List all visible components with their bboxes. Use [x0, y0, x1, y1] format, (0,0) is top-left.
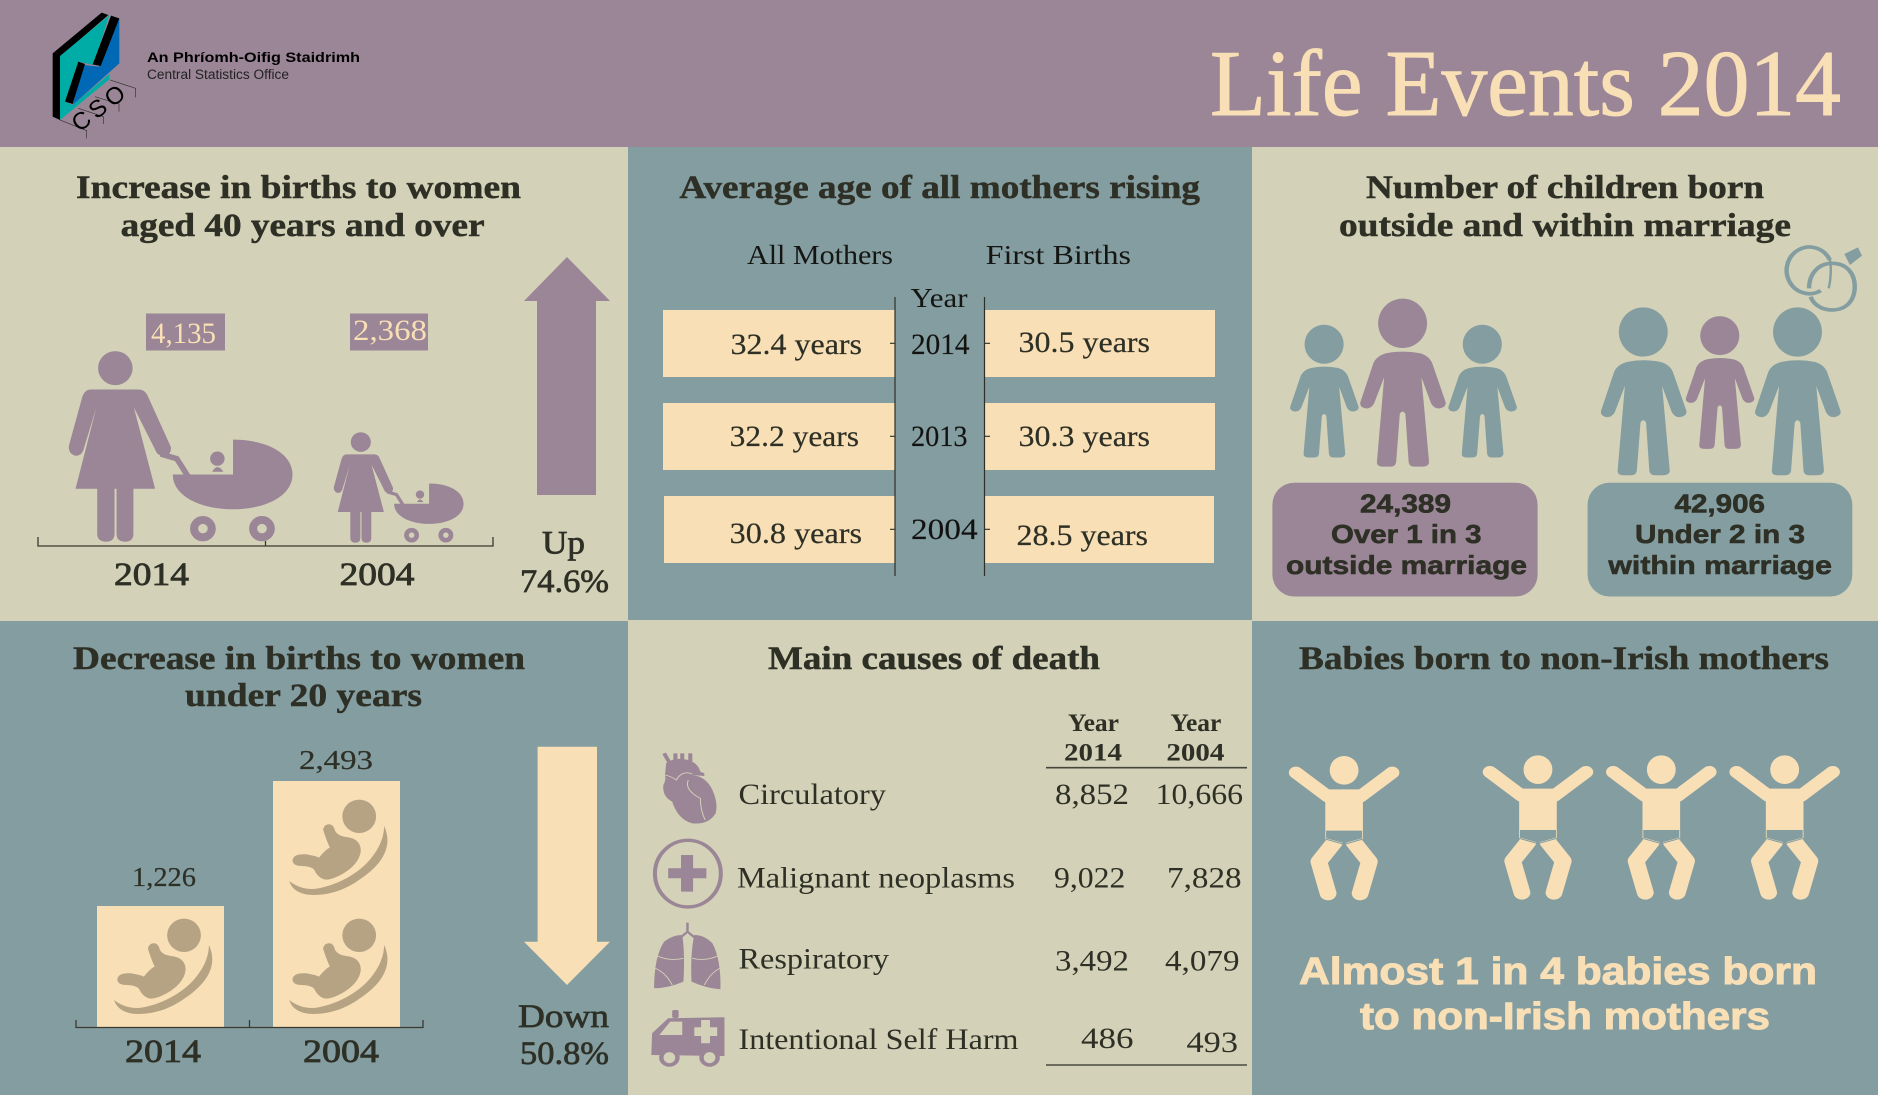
row intentional self harm	[738, 1022, 1238, 1059]
row intentional self harm: Intentional Self Harm	[738, 1023, 1018, 1056]
value box 2014: 4,135	[151, 317, 216, 350]
column label first births: First Births	[986, 240, 1131, 270]
row circulatory: Circulatory	[738, 778, 886, 811]
heading: Main causes of death	[768, 641, 1100, 677]
value 1,226: 1,226	[132, 862, 196, 892]
table header 2004: Year	[1170, 710, 1221, 737]
logo Irish name: An Phríomh-Oifig Staidrimh	[147, 50, 360, 65]
row 2013 boxes	[663, 403, 1215, 470]
value 2,493: 2,493	[299, 745, 373, 775]
value all mothers 2014: 32.4 years	[730, 328, 862, 361]
row intentional self harm: 486	[1081, 1022, 1134, 1055]
row respiratory: 4,079	[1165, 945, 1240, 978]
statement line 2: to non-Irish mothers	[1360, 996, 1770, 1038]
year 2004: 2004	[911, 513, 978, 546]
table header 2004	[1166, 710, 1225, 767]
row malignant neoplasms	[737, 862, 1242, 895]
row respiratory: Respiratory	[738, 942, 889, 975]
icon: family within marriage	[1601, 307, 1841, 475]
value all mothers 2004: 30.8 years	[730, 517, 862, 550]
table header 2014	[1064, 710, 1123, 767]
heading line 2: under 20 years	[185, 678, 422, 714]
label 74.6%: 74.6%	[520, 564, 609, 600]
heading: Decrease in births to women	[73, 641, 525, 677]
table header 2004: 2004	[1166, 740, 1225, 767]
heading line 2: aged 40 years and over	[121, 208, 485, 244]
panel: births to women under 20	[0, 621, 628, 1095]
year 2013: 2013	[911, 420, 968, 453]
bar 2004	[273, 781, 400, 1027]
callout: within marriage: within marriage	[1607, 550, 1832, 580]
icon: woman with pram 2014	[69, 351, 293, 542]
heading: Increase in births to women	[76, 170, 521, 206]
value first births 2004: 28.5 years	[1016, 519, 1148, 552]
icon: wedding rings	[1787, 247, 1862, 310]
label up: Up	[542, 526, 585, 562]
label 2014: 2014	[125, 1034, 201, 1070]
logo English name: Central Statistics Office	[147, 67, 289, 82]
callout: within marriage	[1588, 483, 1852, 596]
icon: ambulance	[651, 1010, 724, 1065]
icon: heart	[663, 753, 716, 824]
column label year: Year	[910, 283, 968, 313]
axis	[76, 1020, 423, 1028]
table header 2014: 2014	[1064, 740, 1123, 767]
bar 2014	[97, 906, 224, 1027]
logo lettering CSO: CSO	[67, 77, 134, 137]
heading: Number of children born	[1366, 170, 1764, 206]
icon: lungs	[654, 923, 720, 989]
value first births 2013: 30.3 years	[1018, 420, 1150, 453]
value box 2004: 2,368	[353, 314, 427, 347]
row intentional self harm: 493	[1186, 1026, 1238, 1059]
row malignant neoplasms: Malignant neoplasms	[737, 862, 1015, 895]
arrow up	[524, 257, 610, 495]
value first births 2014: 30.5 years	[1018, 326, 1150, 359]
row 2014 boxes	[663, 310, 1215, 377]
label 2014: 2014	[114, 557, 189, 593]
heading: Babies born to non-Irish mothers	[1299, 641, 1829, 677]
panel: header banner	[0, 0, 1878, 147]
callout: within marriage: 42,906	[1674, 488, 1765, 518]
label 2004: 2004	[303, 1034, 379, 1070]
panel: births to women aged 40 and over	[0, 147, 628, 620]
panel: main causes of death	[628, 621, 1252, 1095]
row 2004 boxes	[664, 496, 1214, 563]
label down: Down	[518, 999, 609, 1035]
panel: children born outside and within marriage	[1252, 147, 1878, 620]
callout: outside marriage: 24,389	[1360, 488, 1451, 518]
icon: CSO logo	[53, 13, 136, 138]
value all mothers 2013: 32.2 years	[730, 420, 859, 453]
year 2014: 2014	[911, 328, 970, 361]
heading: Average age of all mothers rising	[679, 170, 1201, 206]
table header 2014: Year	[1068, 710, 1119, 737]
column label all mothers: All Mothers	[747, 240, 893, 270]
row respiratory	[738, 942, 1240, 978]
statement line 1: Almost 1 in 4 babies born	[1299, 951, 1817, 993]
panel: average age of mothers	[628, 147, 1252, 620]
row malignant neoplasms: 7,828	[1167, 862, 1242, 895]
heading line 2: outside and within marriage	[1339, 208, 1791, 244]
row respiratory: 3,492	[1055, 945, 1129, 978]
icon: baby figures	[1296, 755, 1833, 893]
title: Life Events 2014	[1210, 32, 1841, 136]
row malignant neoplasms: 9,022	[1054, 862, 1125, 895]
label 2004: 2004	[340, 557, 414, 593]
callout: outside marriage: Over 1 in 3	[1331, 519, 1482, 549]
label 50.8%: 50.8%	[520, 1036, 609, 1072]
icon: family outside marriage	[1290, 299, 1517, 467]
row circulatory: 8,852	[1055, 778, 1129, 811]
panel: babies born to non-Irish mothers	[1252, 621, 1878, 1095]
arrow down	[524, 747, 610, 985]
row circulatory: 10,666	[1156, 778, 1243, 811]
year column rules	[890, 297, 990, 576]
callout: outside marriage: outside marriage	[1286, 550, 1527, 580]
icon: medical cross	[655, 840, 721, 907]
callout: within marriage: Under 2 in 3	[1635, 519, 1805, 549]
icon: woman with pram 2004	[334, 432, 464, 543]
axis	[38, 537, 493, 546]
row circulatory	[738, 778, 1243, 811]
callout: outside marriage	[1272, 483, 1538, 596]
